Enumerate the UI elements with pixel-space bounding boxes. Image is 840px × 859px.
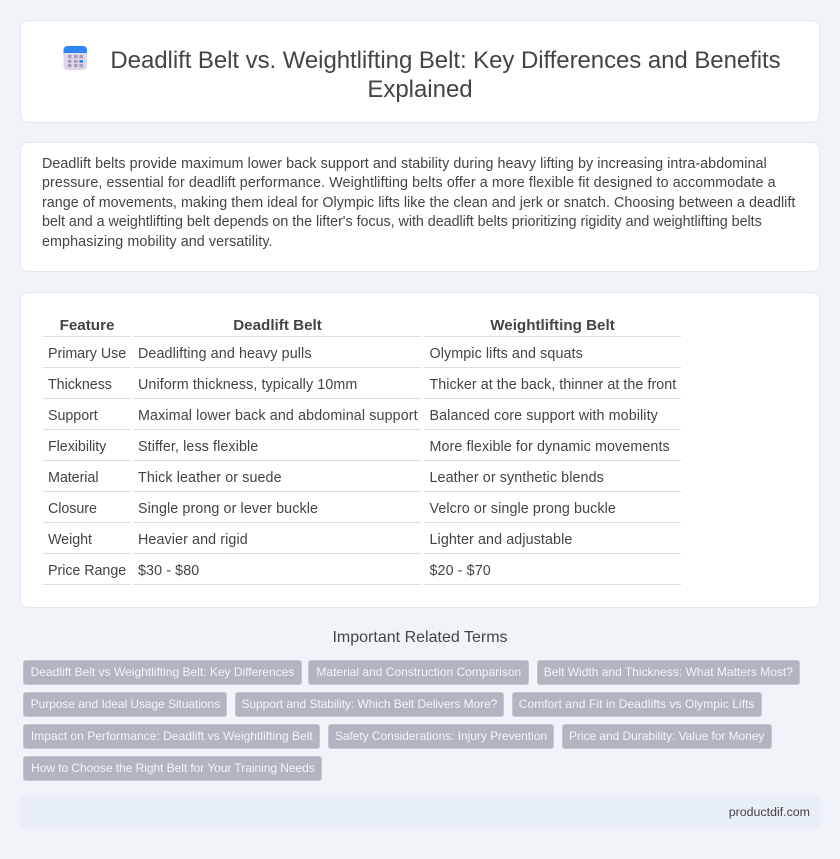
row: Thickness: Thicker at the back, thinner at the front (430, 377, 676, 393)
text block: summary (42, 156, 796, 250)
tag (537, 660, 800, 685)
tag (23, 660, 302, 685)
row: Flexibility: Flexibility (48, 439, 106, 455)
row: Closure: Closure (48, 501, 97, 517)
tag: Purpose and Ideal Usage Situations (31, 697, 220, 711)
panel: related term tags (23, 660, 800, 781)
heading: related terms: Important Related Terms (332, 629, 508, 646)
tag: Safety Considerations: Injury Prevention (335, 729, 547, 743)
tag (562, 724, 772, 749)
icon: calendar (64, 46, 87, 70)
text block: summary: pressure, essential for deadlift performance. Weightlifting belts offer a more flexible fit designed to accommodate a (42, 175, 776, 191)
text block: summary: emphasizing mobility and versatility. (42, 234, 273, 250)
tag (308, 660, 529, 685)
tag: Price and Durability: Value for Money (569, 729, 764, 743)
row: Material (48, 470, 604, 486)
title (110, 46, 781, 103)
row: Primary Use: Primary Use (48, 346, 126, 362)
row: Price Range: $30 - $80 (138, 563, 199, 579)
table header row: Deadlift Belt (233, 317, 322, 334)
tag: Belt Width and Thickness: What Matters Most? (544, 665, 793, 679)
tag (23, 724, 320, 749)
row: Weight: Heavier and rigid (138, 532, 248, 548)
panel: summary paragraph card (20, 142, 820, 272)
table header row (60, 317, 615, 334)
row: Primary Use (48, 346, 583, 362)
title: Deadlift Belt vs. Weightlifting Belt: Key Differences and Benefits (110, 46, 781, 74)
row: Flexibility: Stiffer, less flexible (138, 439, 258, 455)
tag: Material and Construction Comparison (316, 665, 521, 679)
footer text: site name: productdif.com (729, 805, 810, 819)
row: Material: Thick leather or suede (138, 470, 282, 486)
panel: title card (20, 20, 820, 123)
row: Material: Leather or synthetic blends (430, 470, 604, 486)
tag: Impact on Performance: Deadlift vs Weightlifting Belt (31, 729, 313, 743)
row: Weight (48, 532, 572, 548)
table header row: Weightlifting Belt (490, 317, 615, 334)
row: Closure: Velcro or single prong buckle (430, 501, 616, 517)
tag: Deadlift Belt vs Weightlifting Belt: Key Differences (31, 665, 294, 679)
text block: summary: belt and a weightlifting belt depends on the lifter's focus, with deadlift belts prioritizing rigidity and weightlifting belts (42, 214, 762, 230)
row: Weight: Weight (48, 532, 92, 548)
tag: Comfort and Fit in Deadlifts vs Olympic Lifts (519, 697, 755, 711)
row: Primary Use: Deadlifting and heavy pulls (138, 346, 312, 362)
row: Closure (48, 501, 616, 517)
tag (234, 692, 504, 717)
row: Closure: Single prong or lever buckle (138, 501, 318, 517)
table header row: Feature (60, 317, 114, 334)
tag (23, 756, 322, 781)
row: Thickness: Thickness (48, 377, 112, 393)
row: Thickness: Uniform thickness, typically 10mm (138, 377, 357, 393)
row: Support: Support (48, 408, 98, 424)
row: Support: Balanced core support with mobility (430, 408, 658, 424)
tag (512, 692, 762, 717)
comparison table (43, 317, 681, 585)
text block: summary: range of movements, making them ideal for Olympic lifts like the clean and jerk or snatch. Choosing between a deadlift (42, 195, 795, 211)
row: Weight: Lighter and adjustable (430, 532, 572, 548)
row: Support (48, 408, 658, 424)
tag (328, 724, 554, 749)
tag (23, 692, 227, 717)
title: Explained (367, 76, 473, 103)
footer bar (20, 795, 820, 829)
row: Price Range: Price Range (48, 563, 126, 579)
row: Price Range: $20 - $70 (430, 563, 491, 579)
row: Primary Use: Olympic lifts and squats (430, 346, 583, 362)
row: Flexibility: More flexible for dynamic movements (430, 439, 670, 455)
row: Flexibility (48, 439, 670, 455)
row: Price Range (48, 563, 491, 579)
text block: summary: Deadlift belts provide maximum lower back support and stability during heavy lifting by increasing intra-abdominal (42, 156, 767, 172)
tag: Support and Stability: Which Belt Delivers More? (241, 697, 497, 711)
tag: How to Choose the Right Belt for Your Training Needs (31, 761, 315, 775)
row: Material: Material (48, 470, 98, 486)
row: Support: Maximal lower back and abdominal support (138, 408, 418, 424)
row: Thickness (48, 377, 676, 393)
panel: comparison table card (20, 292, 820, 608)
